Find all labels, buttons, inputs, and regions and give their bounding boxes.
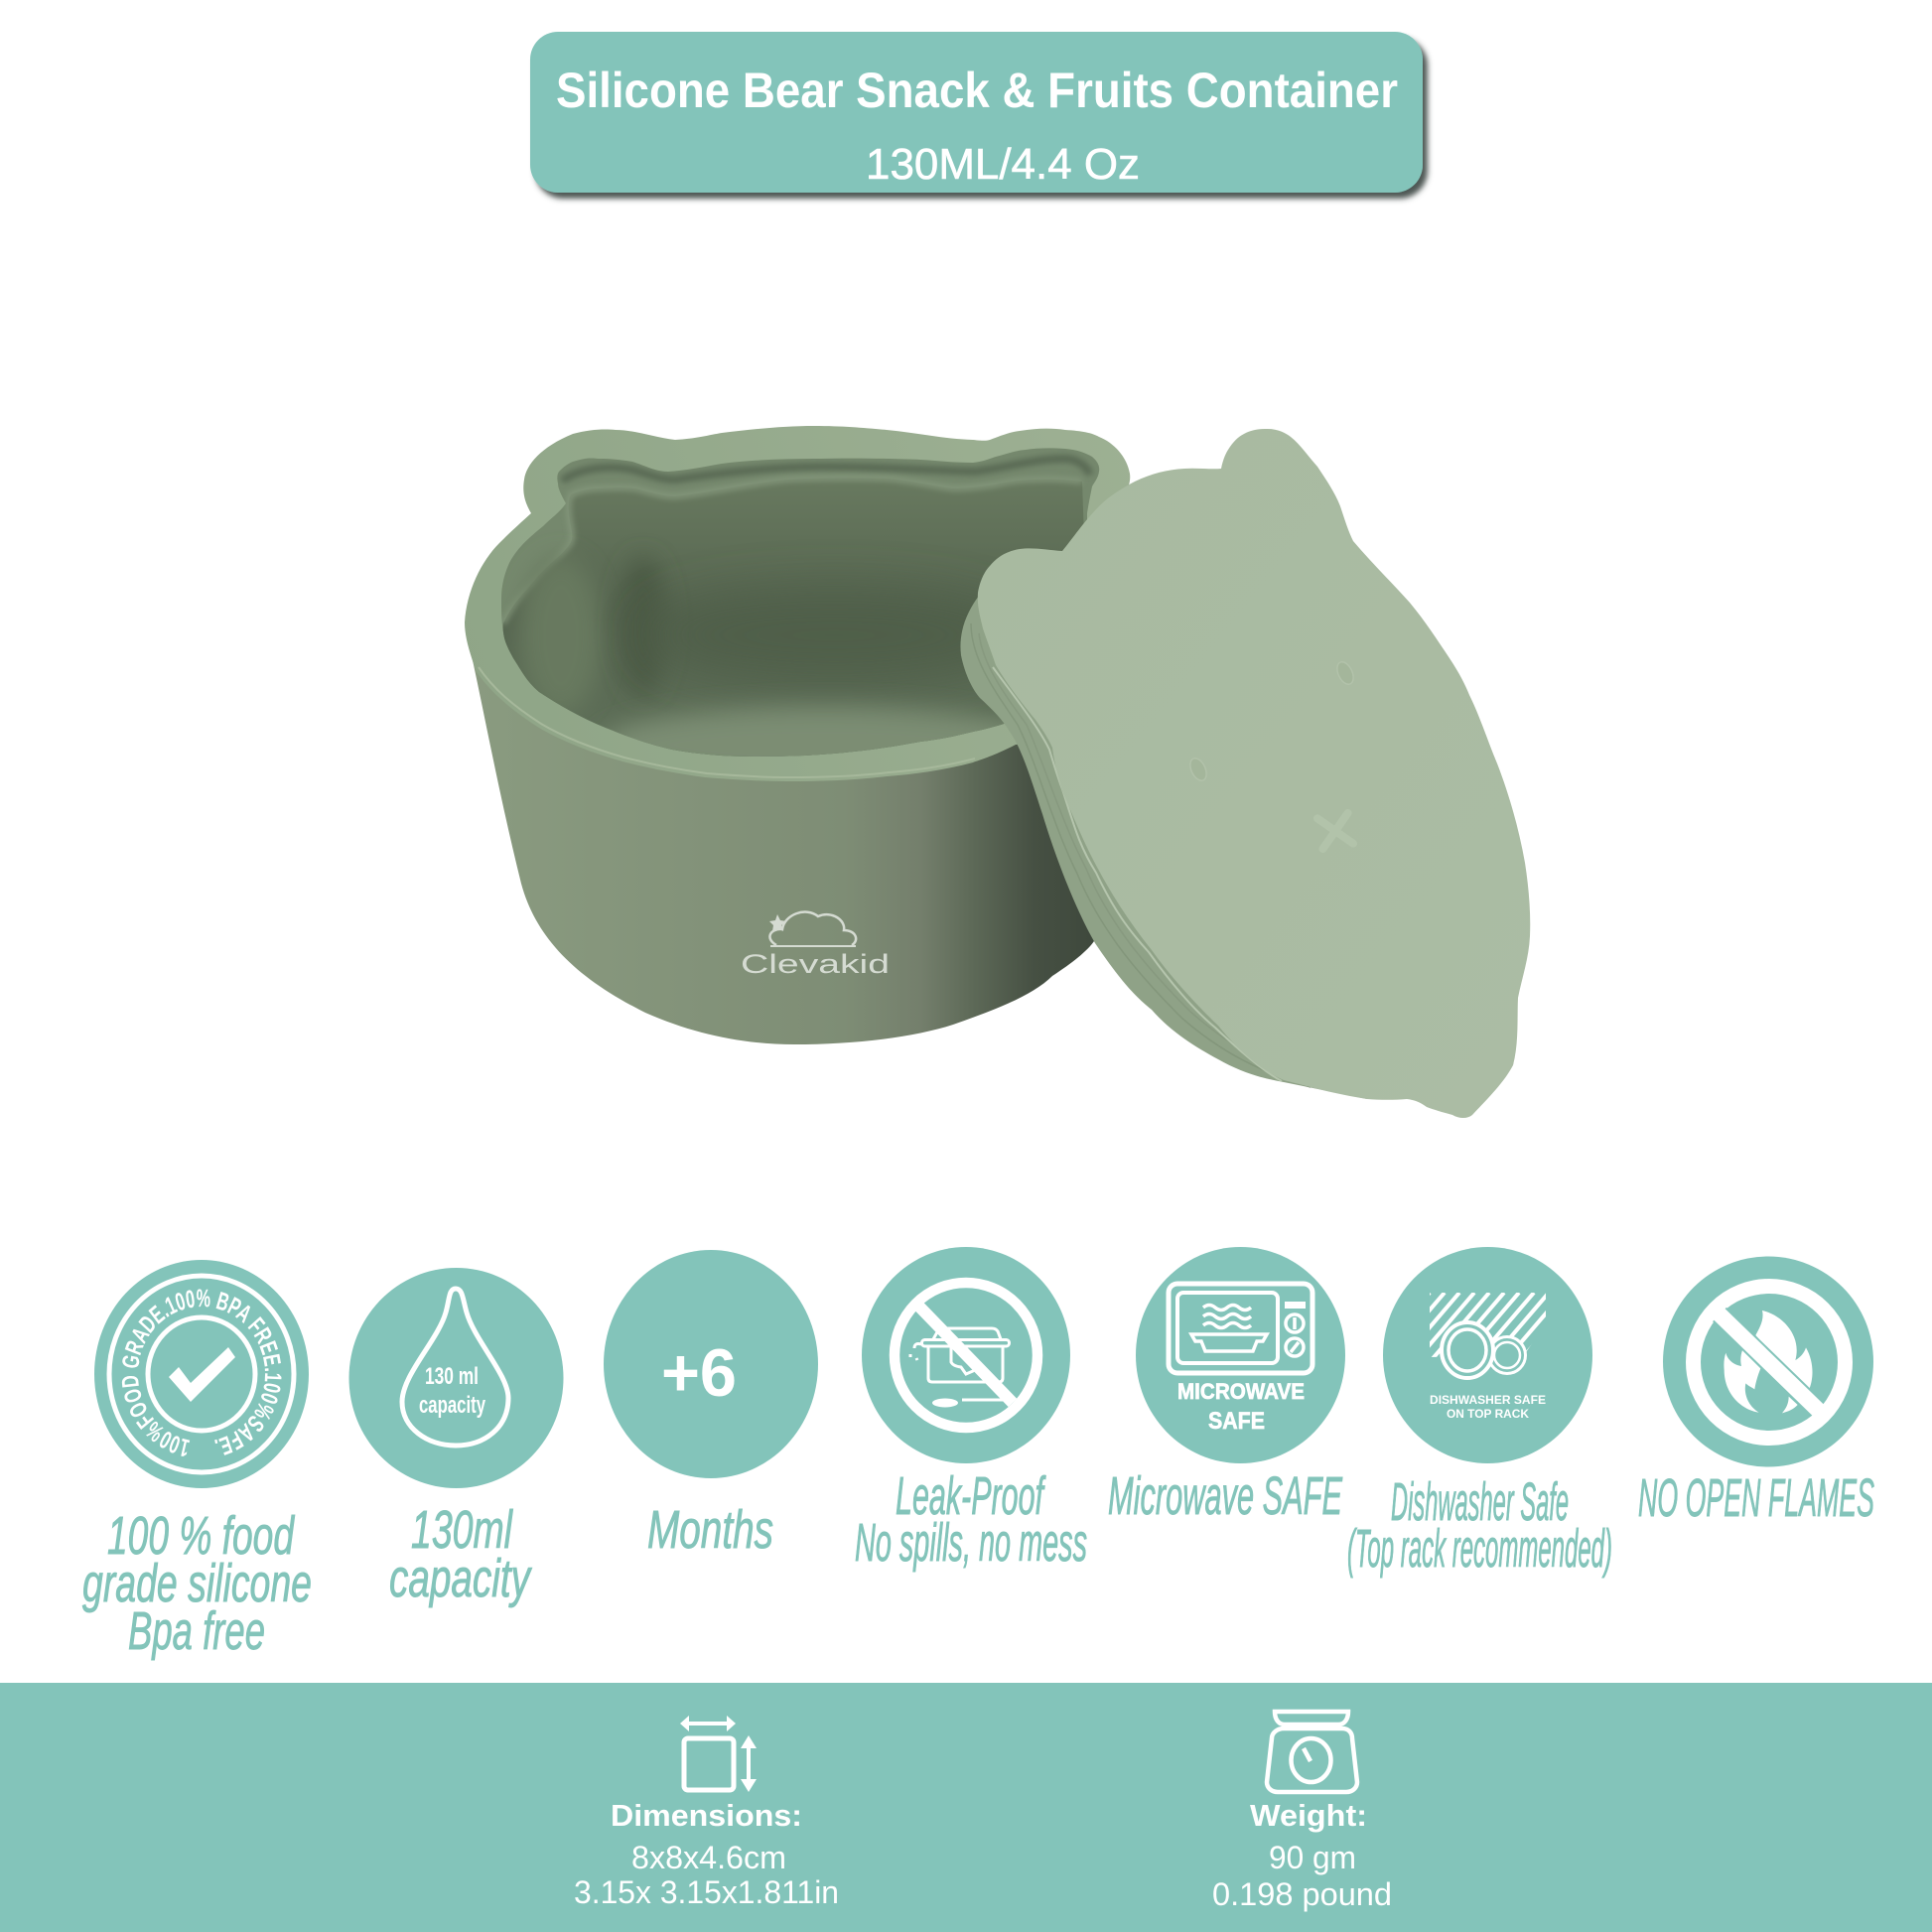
bowl rim (465, 426, 1130, 781)
microwave door (1177, 1293, 1278, 1363)
leak stain (951, 1347, 979, 1374)
dimensions heading: Dimensions: (611, 1798, 802, 1833)
text: (Top rack recommended) (1347, 1519, 1612, 1579)
icon: dimensions (680, 1716, 757, 1792)
badge circle (1136, 1247, 1345, 1463)
container lid (921, 1340, 1009, 1346)
strike edge (1720, 1314, 1817, 1409)
control knobs (1191, 1305, 1304, 1356)
inner ring (148, 1317, 255, 1431)
dimensions imperial: 3.15x 3.15x1.811in (574, 1874, 839, 1910)
badge circle (349, 1268, 564, 1488)
ledge background (501, 448, 1100, 631)
strike line (1718, 1312, 1819, 1411)
brand logo (741, 912, 890, 979)
container knob (933, 1328, 1001, 1339)
label: food grade (82, 1506, 312, 1661)
waves (1203, 1305, 1251, 1328)
small plate (1489, 1336, 1525, 1374)
stripes (1430, 1293, 1546, 1357)
header banner (530, 32, 1423, 193)
badge: leak-proof (862, 1247, 1070, 1463)
badge circle (94, 1260, 309, 1488)
line 3: Bpa free (128, 1601, 265, 1661)
hatch lines (1430, 1293, 1546, 1357)
line 2: capacity (389, 1549, 532, 1608)
dish (1191, 1334, 1267, 1351)
drop text line 2: capacity (419, 1392, 485, 1419)
microwave outline (1169, 1284, 1312, 1373)
scale pan (1275, 1712, 1348, 1725)
surface line (962, 1398, 1010, 1402)
icon: weighing scale (1267, 1712, 1357, 1792)
line 2: grade silicone (82, 1554, 312, 1613)
bowl opening (501, 448, 1100, 757)
dimensions metric: 8x8x4.6cm (631, 1840, 786, 1875)
badge circle (862, 1247, 1070, 1463)
logo cloud (769, 912, 856, 945)
badge: 130 ml capacity (349, 1268, 564, 1488)
horizontal arrowheads (680, 1716, 736, 1731)
right lower flame (1782, 1397, 1798, 1413)
line 2: No spills, no mess (855, 1513, 1087, 1573)
drop text line 1: 130 ml (425, 1363, 479, 1390)
+6 text: +6 (661, 1335, 737, 1411)
bowl floor (608, 698, 1005, 757)
knob 2 (1286, 1338, 1304, 1356)
prohibition ring (1694, 1287, 1845, 1438)
check mark (169, 1347, 235, 1402)
rim lip highlight (479, 667, 975, 777)
scale dial (1291, 1738, 1330, 1782)
left flame (1724, 1350, 1760, 1413)
badge: +6 (604, 1250, 818, 1478)
strike line (918, 1306, 1013, 1403)
knob marks (1291, 1317, 1299, 1352)
small plate inner (1494, 1342, 1520, 1368)
lid side layers (960, 596, 1367, 1099)
vertical arrow (747, 1745, 751, 1783)
badge circle (1663, 1257, 1873, 1467)
upper flame (1755, 1311, 1813, 1393)
badge circle (1383, 1247, 1592, 1463)
line 1: 130ml (411, 1500, 513, 1560)
lid layer groove (979, 633, 1311, 1083)
badge: no open flames (1663, 1257, 1873, 1467)
label: capacity (389, 1500, 532, 1608)
flame icon (1724, 1311, 1813, 1413)
drip (914, 1344, 921, 1348)
inner wall (496, 478, 1092, 764)
container body (928, 1347, 1003, 1382)
product photo: bear snack container and lid (465, 426, 1530, 1118)
weight imperial: 0.198 pound (1212, 1876, 1392, 1912)
lid edge highlight (993, 667, 1282, 1081)
band background (0, 1683, 1932, 1932)
knob 1 (1286, 1314, 1304, 1332)
curved seal text: 100%FOOD GRADE.100% BPA FREE.100%SAFE. (121, 1289, 282, 1456)
microwave text line 1: MICROWAVE (1177, 1379, 1305, 1404)
logo baseline (770, 945, 856, 947)
horizontal arrow (687, 1722, 729, 1725)
title: Silicone Bear Snack & Fruits Container (556, 63, 1398, 118)
lid embossed dot: left (1187, 756, 1209, 783)
corner shadow (622, 560, 661, 689)
ledge highlight line (503, 478, 1082, 623)
drip dots (910, 1354, 917, 1360)
outer ring (109, 1276, 294, 1472)
lid embossed dot: top (1334, 659, 1356, 687)
logo star (769, 914, 786, 931)
container icon (910, 1328, 1010, 1400)
badge: dishwasher safe (1370, 1247, 1592, 1463)
dishwasher text line 1: DISHWASHER SAFE (1430, 1393, 1546, 1407)
shadow under rim (562, 459, 1090, 481)
back wall shadow (731, 646, 936, 663)
line 1: Leak-Proof (896, 1466, 1046, 1526)
label: leak-proof (855, 1466, 1087, 1573)
weight metric: 90 gm (1269, 1840, 1356, 1875)
microwave text line 2: SAFE (1208, 1408, 1265, 1435)
label: microwave safe: Microwave SAFE (1108, 1466, 1343, 1526)
bowl body (473, 660, 1094, 1044)
banner background (530, 32, 1423, 193)
lid top surface (978, 429, 1530, 1118)
prohibition ring (895, 1283, 1037, 1428)
lid embossed cross (1305, 800, 1366, 862)
box (684, 1738, 734, 1790)
label: dishwasher safe (1347, 1472, 1612, 1579)
left wall light (519, 556, 603, 715)
label: dishwasher safe: Dishwasher Safe (1391, 1472, 1569, 1532)
scale body (1267, 1728, 1357, 1792)
badge: microwave safe (1136, 1247, 1345, 1463)
line 1: 100 % food (107, 1506, 295, 1566)
control display (1285, 1302, 1306, 1309)
dial needle (1304, 1748, 1311, 1761)
lid layer groove (971, 623, 1311, 1087)
logo wordmark: Clevakid (741, 949, 890, 979)
weight heading: Weight: (1250, 1798, 1367, 1833)
large plate (1442, 1322, 1493, 1378)
dishwasher text line 2: ON TOP RACK (1447, 1407, 1529, 1421)
badge: 100% food grade (94, 1260, 309, 1488)
water drop icon (402, 1289, 508, 1446)
puddle (932, 1398, 958, 1408)
label: months: Months (647, 1500, 773, 1560)
badge circle (604, 1250, 818, 1478)
large plate inner (1449, 1329, 1486, 1371)
bottom specification band (0, 1683, 1932, 1932)
vertical arrowheads (741, 1735, 757, 1792)
subtitle: 130ML/4.4 Oz (866, 140, 1140, 189)
